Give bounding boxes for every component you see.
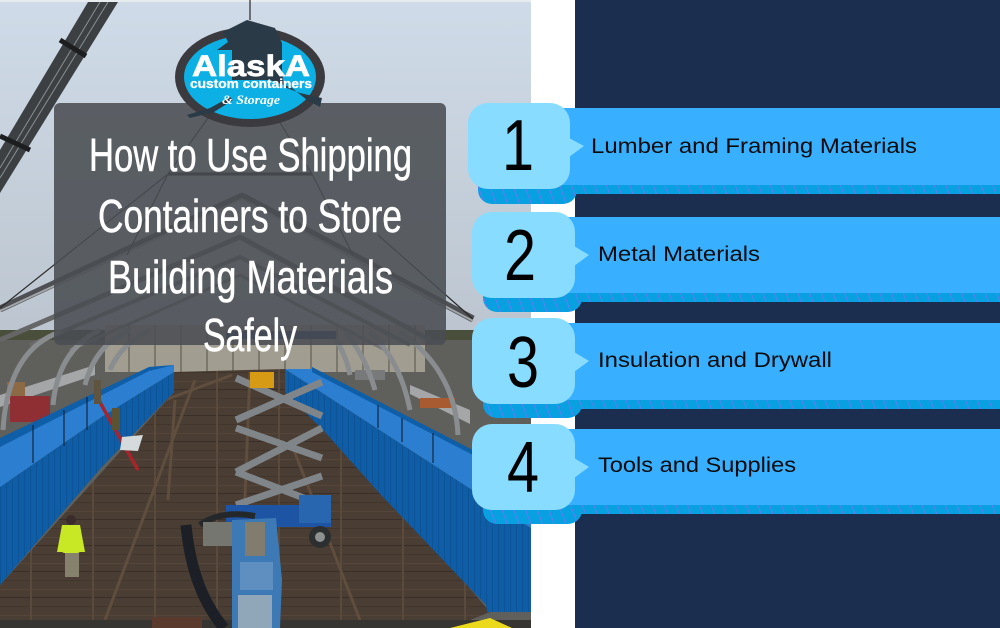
arches and truss (0, 0, 473, 435)
list item 2: Metal Materials (598, 242, 760, 266)
list item 4: 4 (507, 427, 539, 507)
left container row (0, 365, 174, 585)
worker in hi-vis jacket (57, 515, 85, 577)
list item 1: 1 (502, 105, 534, 185)
title: Containers to Store (98, 190, 402, 242)
wooden floor (0, 369, 490, 620)
yellow safety object (450, 618, 512, 628)
logo: Alaska Custom Containers & Storage (175, 20, 325, 127)
red ladder and workers (94, 380, 143, 470)
excavator attachment (186, 514, 282, 628)
list item 3: 3 (507, 322, 539, 402)
Alaska map silhouette (187, 20, 322, 118)
crane boom (0, 2, 118, 193)
list item 2: 2 (504, 215, 536, 295)
right container row (285, 367, 531, 612)
list item 2 (472, 212, 1000, 312)
list item 3 (472, 318, 1000, 418)
logo: Alaska Custom Containers & Storage: custom containers (190, 77, 312, 91)
scissor lift (226, 331, 336, 548)
list item 1 (468, 103, 1000, 204)
ground behind containers (0, 325, 531, 628)
list item 1: Lumber and Framing Materials (591, 134, 917, 158)
title (89, 129, 412, 361)
logo: Alaska Custom Containers & Storage: & Storage (222, 92, 280, 107)
list item 4: Tools and Supplies (598, 453, 796, 477)
title: Safely (203, 309, 297, 361)
list item 3: Insulation and Drywall (598, 348, 832, 372)
photo: container storage site under construction (0, 0, 531, 628)
title: How to Use Shipping (89, 129, 412, 181)
logo: Alaska Custom Containers & Storage: AlaskA (192, 50, 310, 83)
title: Building Materials (108, 251, 393, 303)
list item 4 (472, 424, 1000, 524)
title panel (54, 103, 446, 345)
